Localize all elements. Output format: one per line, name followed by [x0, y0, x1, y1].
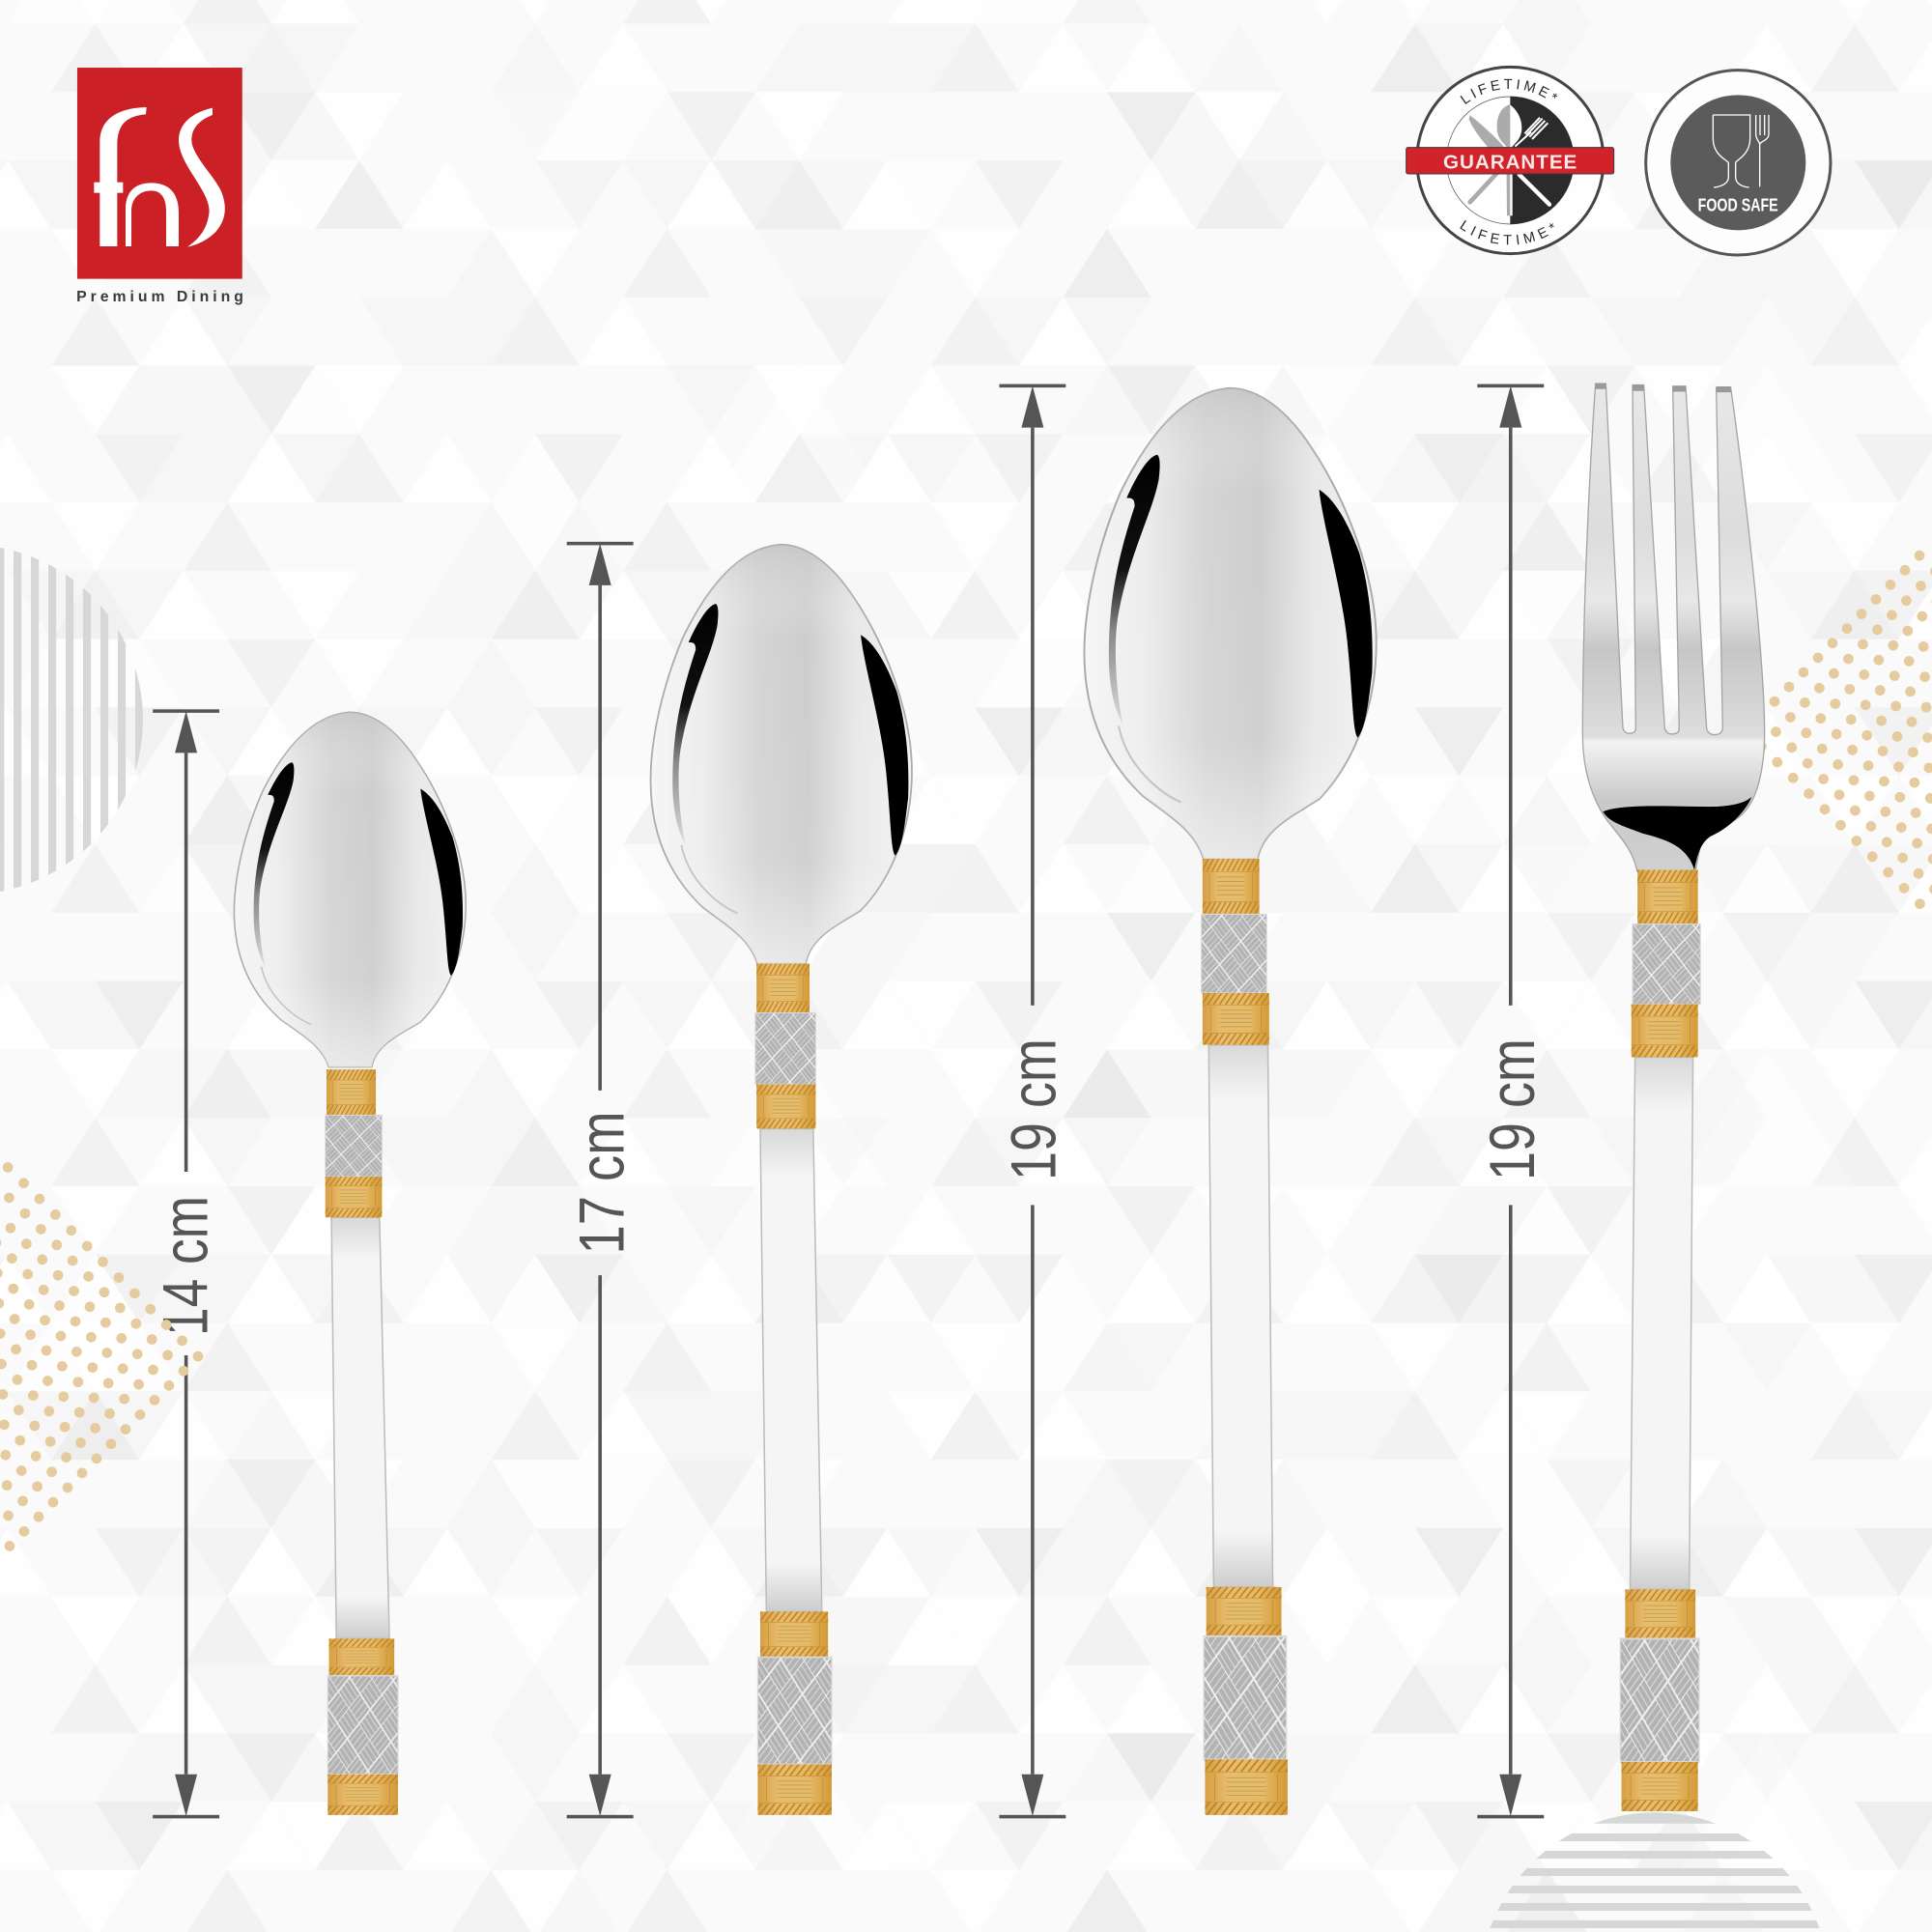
fork [1582, 384, 1765, 1811]
label 19 cm: 19 cm [998, 1038, 1068, 1180]
label 19 cm: 19 cm [1477, 1038, 1548, 1180]
large spoon [1084, 388, 1377, 1815]
medium spoon [651, 545, 912, 1815]
decoration: left dot diamond [0, 1162, 203, 1551]
decoration: bottom striped half circle [1490, 1812, 1820, 1928]
measure: 17 cm [566, 542, 637, 1818]
label 17 cm: 17 cm [566, 1112, 637, 1254]
label 14 cm: 14 cm [150, 1196, 220, 1336]
decoration: left striped half circle [0, 548, 143, 892]
bottom arc text: LIFETIME* [1460, 220, 1554, 245]
food safe label: FOOD SAFE [1698, 194, 1778, 214]
logo letters fnS [94, 107, 225, 247]
logo: FnS Premium Dining [76, 68, 243, 305]
measure: 19 cm fork [1477, 384, 1548, 1818]
measure: 14 cm [150, 709, 220, 1818]
fork head [1582, 384, 1765, 871]
small spoon [234, 712, 466, 1815]
measure: 19 cm spoon [998, 384, 1068, 1818]
badge: food safe [1646, 71, 1831, 255]
decoration: right dot diamond [1741, 551, 1932, 909]
tagline: Premium Dining [76, 289, 243, 305]
banner text: GUARANTEE [1443, 151, 1577, 173]
badge: lifetime guarantee [1406, 66, 1615, 255]
top arc text: LIFETIME* [1461, 79, 1557, 104]
